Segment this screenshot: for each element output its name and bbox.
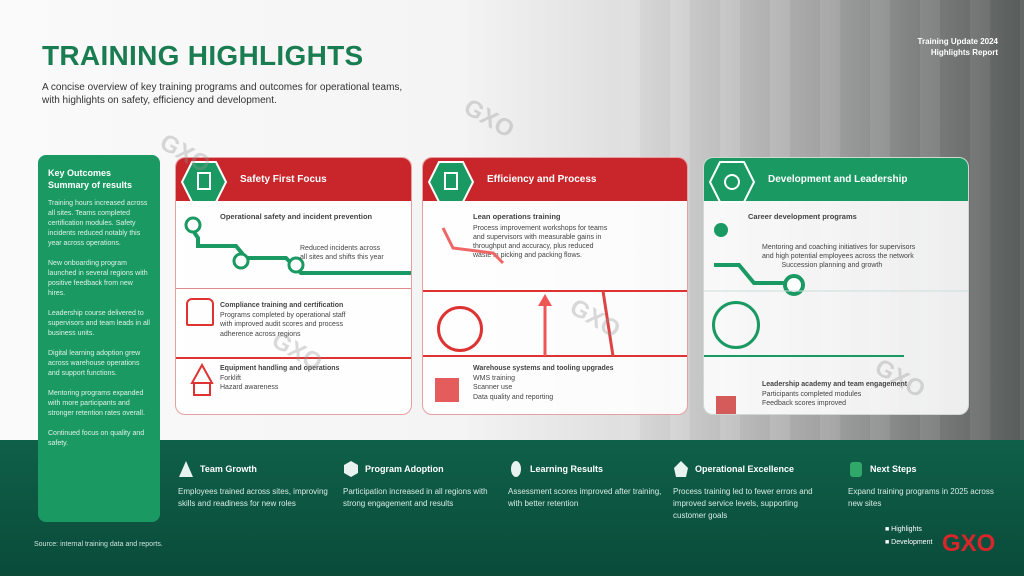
card 1: Reduced incidents across bbox=[300, 245, 380, 252]
card 3: Mentoring and coaching initiatives for supervisors bbox=[762, 244, 915, 251]
top right label: Training Update 2024 bbox=[918, 37, 998, 46]
card 2: WMS training bbox=[473, 374, 515, 382]
bottom item: next steps bbox=[848, 462, 994, 508]
card 2: throughput and accuracy, plus reduced bbox=[473, 243, 594, 250]
bottom item: operational excellence bbox=[673, 461, 813, 520]
bottom item: next steps: Expand training programs in 2025 across new sites bbox=[848, 487, 994, 508]
card 3: and high potential employees across the network bbox=[762, 253, 914, 260]
bottom item: next steps: Next Steps bbox=[870, 464, 917, 474]
bottom item: team growth: Employees trained across sites, improving skills and readiness for new roles bbox=[178, 487, 328, 508]
card 1: Compliance training and certification bbox=[220, 302, 343, 309]
card 3: Feedback scores improved bbox=[762, 400, 846, 407]
left panel: Mentoring programs expanded with more participants and stronger retention rates overall. bbox=[48, 390, 145, 417]
title: TRAINING HIGHLIGHTS bbox=[42, 40, 363, 71]
left panel: Key Outcomes bbox=[48, 168, 111, 178]
card 2: Warehouse systems and tooling upgrades bbox=[473, 365, 614, 372]
text: GXO bbox=[267, 327, 327, 377]
icon: circle bbox=[437, 306, 483, 352]
icon: hex bbox=[428, 161, 474, 201]
card 3: Participants completed modules bbox=[762, 390, 861, 398]
card 2: Data quality and reporting bbox=[473, 394, 553, 400]
card 1: adherence across regions bbox=[220, 330, 301, 338]
card 1: with improved audit scores and process bbox=[220, 321, 343, 328]
legend: ■ Development bbox=[885, 539, 932, 546]
logo: GXO bbox=[942, 530, 995, 557]
bottom item: team growth bbox=[178, 461, 328, 508]
card 2: Efficiency and Process bbox=[487, 174, 596, 185]
bottom item: learning results: Assessment scores improved after training, with better retention bbox=[508, 487, 661, 508]
bottom item: operational excellence: Operational Excellence bbox=[695, 464, 794, 474]
legend: ■ Highlights bbox=[885, 526, 922, 533]
bottom band bbox=[0, 440, 1024, 576]
left panel: Digital learning adoption grew across warehouse operations and support functions. bbox=[48, 350, 140, 377]
left panel: Continued focus on quality and safety. bbox=[48, 430, 144, 447]
icon: green circle bbox=[712, 301, 760, 349]
bottom item: operational excellence: Process training led to fewer errors and improved service levels, supporting customer goals bbox=[673, 487, 813, 520]
card 1: Forklift bbox=[220, 374, 241, 382]
subtitle: A concise overview of key training programs and outcomes for operational teams, with highlights on safety, efficiency and development. bbox=[42, 82, 402, 106]
card 2 bbox=[422, 157, 688, 415]
bottom item: program adoption: Participation increased in all regions with strong engagement and results bbox=[343, 487, 488, 508]
card 1: Operational safety and incident prevention bbox=[220, 212, 372, 221]
card 3: Development and Leadership bbox=[768, 174, 907, 185]
footer note: Source: internal training data and reports. bbox=[34, 541, 163, 548]
legend bbox=[885, 526, 932, 546]
text: GXO bbox=[870, 354, 930, 404]
card 1: all sites and shifts this year bbox=[300, 254, 384, 261]
card 2: and supervisors with measurable gains in bbox=[473, 234, 601, 241]
left panel: New onboarding program launched in several regions with positive feedback from new hires. bbox=[48, 260, 148, 297]
card 1: Programs completed by operational staff bbox=[220, 312, 346, 318]
card 1: Safety First Focus bbox=[240, 174, 327, 185]
card 1: Hazard awareness bbox=[220, 384, 278, 391]
card 3: Leadership academy and team engagement bbox=[762, 381, 907, 388]
text: GXO bbox=[565, 294, 625, 344]
icon: hex bbox=[708, 161, 756, 201]
bottom item: team growth: Team Growth bbox=[200, 464, 257, 474]
left panel bbox=[38, 155, 160, 522]
text: GXO bbox=[155, 129, 215, 179]
card 2: waste in picking and packing flows. bbox=[473, 252, 582, 259]
icon: chart bbox=[435, 378, 459, 402]
top right label bbox=[918, 37, 998, 57]
card 2: Scanner use bbox=[473, 384, 512, 391]
bottom item: learning results: Learning Results bbox=[530, 464, 603, 474]
card 3: Career development programs bbox=[748, 212, 857, 221]
bottom item: program adoption: Program Adoption bbox=[365, 464, 444, 474]
watermarks: GXO bbox=[459, 94, 519, 144]
left panel: Leadership course delivered to supervisors and team leads in all business units. bbox=[48, 310, 150, 337]
bottom item: program adoption bbox=[343, 461, 488, 508]
bottom item: learning results bbox=[508, 461, 661, 508]
icon: equipment bbox=[190, 363, 214, 396]
card 1 bbox=[175, 157, 412, 415]
icon: hex bbox=[180, 161, 228, 201]
card 3 bbox=[703, 157, 969, 415]
card 1: Equipment handling and operations bbox=[220, 365, 339, 372]
background motion streaks bbox=[620, 0, 1024, 440]
card 2: Lean operations training bbox=[473, 212, 561, 221]
card 2: Process improvement workshops for teams bbox=[473, 225, 607, 232]
top right label: Highlights Report bbox=[931, 48, 998, 57]
left panel: Summary of results bbox=[48, 180, 132, 190]
left panel: Training hours increased across all sites. Teams completed certification modules. Safety incidents reduced notably this year across operations. bbox=[48, 200, 147, 247]
card 3: Succession planning and growth bbox=[781, 262, 882, 269]
icon: lock bbox=[186, 298, 214, 326]
